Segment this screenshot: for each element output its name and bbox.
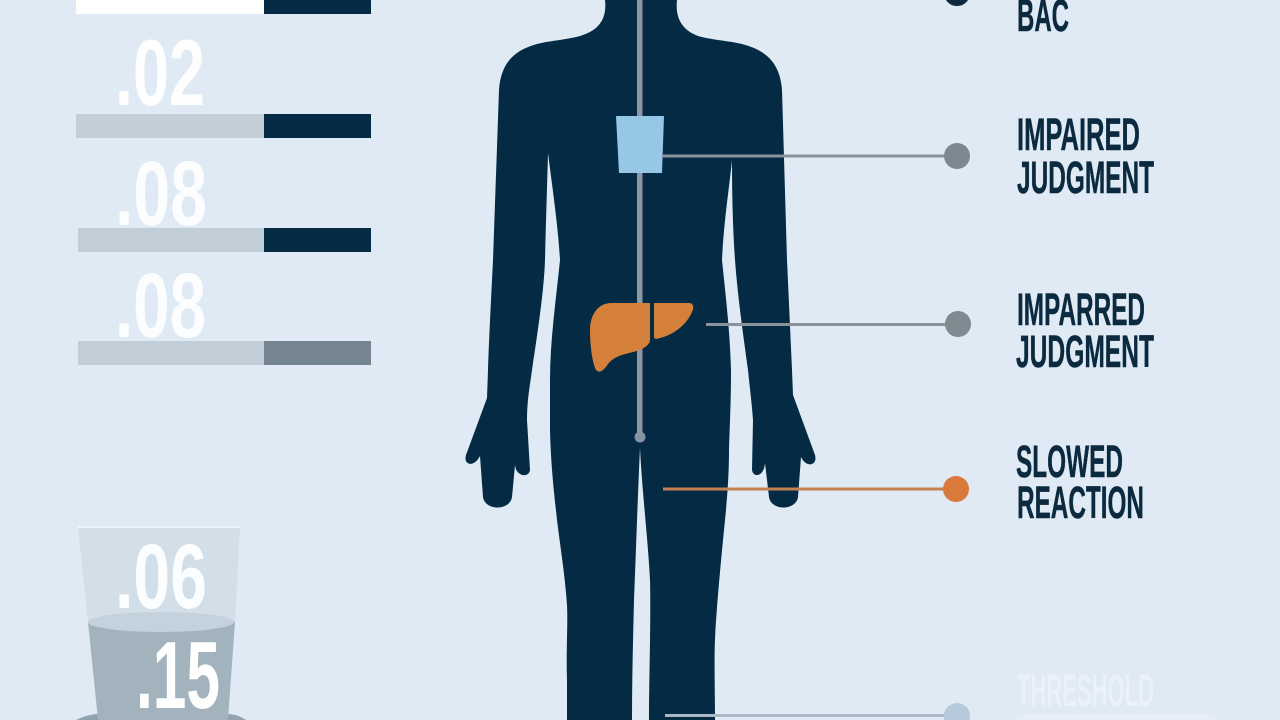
label: slowed reaction: [1016, 436, 1144, 528]
label: slowed reaction: SLOWED: [1016, 436, 1123, 487]
spine line: [634, 0, 646, 442]
bar .08 first: [78, 228, 371, 252]
body silhouette: [465, 0, 815, 720]
bar .02: [76, 114, 371, 138]
panel: BAC level bars: [76, 0, 371, 365]
callout: second impaired judgment connector: [706, 311, 971, 337]
value .06: .06: [115, 526, 207, 628]
callout: BAC marker: [946, 0, 968, 6]
icon: glass with BAC values: [76, 526, 246, 720]
value .02: .02: [115, 20, 205, 125]
icon: stomach cup: [616, 116, 664, 173]
callout: slowed reaction connector: [663, 476, 969, 502]
icon: liver: [590, 302, 693, 372]
value .08 first: .08: [115, 143, 207, 245]
label: impaired judgment first: IMPAIRED: [1017, 109, 1140, 160]
value .08 second: .08: [115, 255, 206, 357]
bar .08 second: [78, 341, 371, 365]
label: impaired judgment second: IMPARRED: [1017, 284, 1145, 335]
callout: first impaired judgment connector: [662, 143, 970, 169]
top bar: [76, 0, 371, 14]
label: slowed reaction: REACTION: [1017, 477, 1144, 528]
label: impaired judgment first: [1017, 109, 1154, 203]
label: impaired judgment first: JUDGMENT: [1017, 152, 1154, 203]
label: impaired judgment second: JUDGMENT: [1016, 326, 1154, 377]
label: impaired judgment second: [1016, 284, 1154, 377]
callout: faded bottom connector: [665, 703, 970, 720]
